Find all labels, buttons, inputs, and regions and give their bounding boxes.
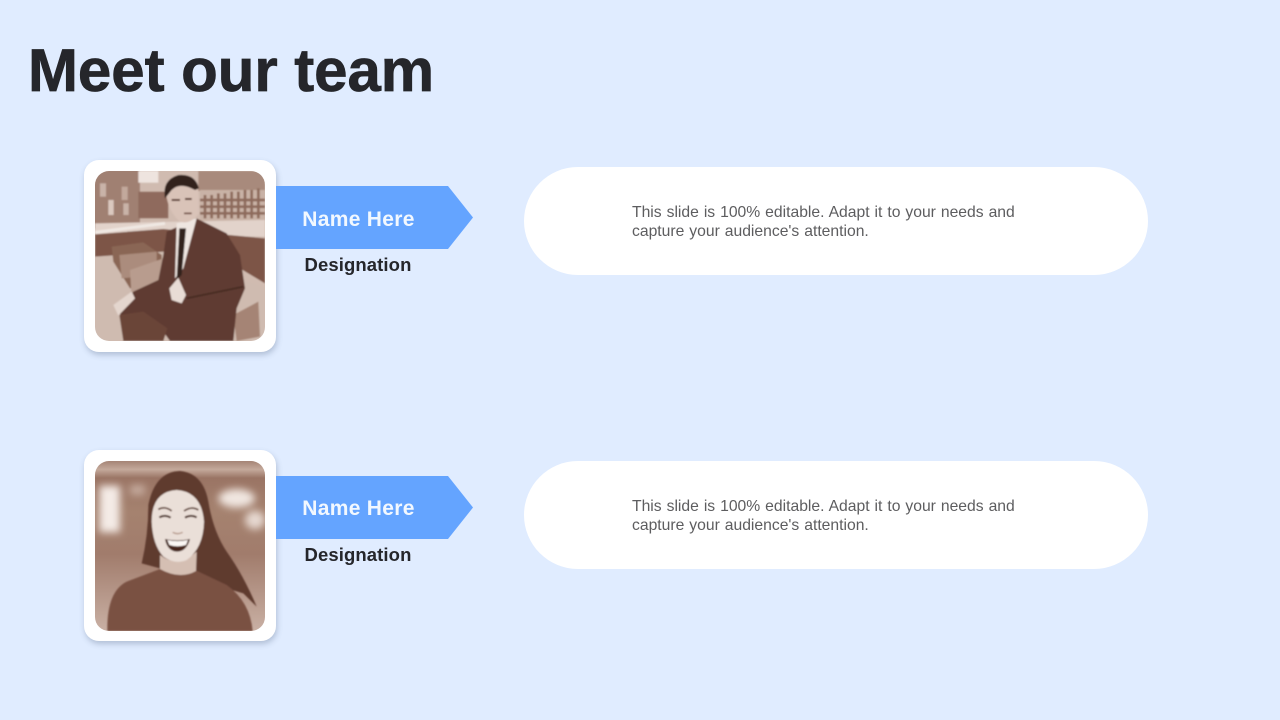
- description text: capture your audience's attention.: [632, 517, 869, 534]
- designation 1: Designation: [304, 254, 411, 275]
- description text: This slide is 100% editable. Adapt it to your needs and: [632, 204, 1015, 221]
- banner: name 1: [276, 186, 473, 249]
- description text: [632, 204, 1015, 240]
- photo: man in suit: [95, 171, 265, 341]
- jacket and legs: [119, 218, 245, 341]
- photo: smiling woman: [95, 461, 265, 631]
- name label: Name Here: [302, 208, 415, 231]
- title: Meet our team: [28, 37, 434, 104]
- banner: name 2: [276, 476, 473, 539]
- designation 2: Designation: [304, 544, 411, 565]
- photo card: man: [84, 160, 276, 352]
- photo card: woman: [84, 450, 276, 641]
- text pill 1: [524, 167, 1148, 275]
- description text: This slide is 100% editable. Adapt it to your needs and: [632, 498, 1015, 515]
- text pill 2: [524, 461, 1148, 569]
- description text: [632, 498, 1015, 534]
- name label: Name Here: [302, 497, 415, 520]
- description text: capture your audience's attention.: [632, 223, 869, 240]
